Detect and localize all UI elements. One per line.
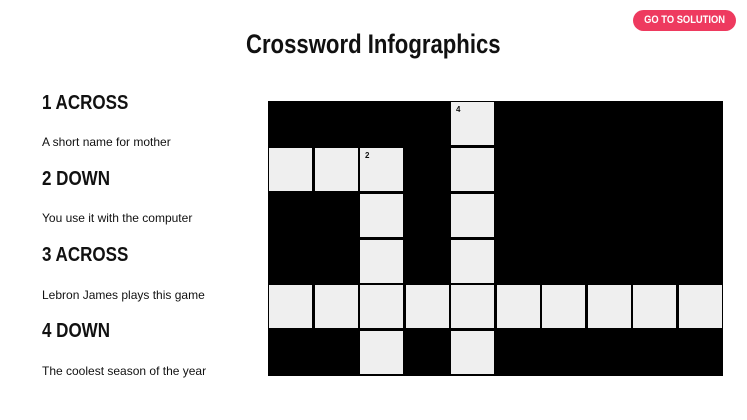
button: go to solution: [633, 10, 736, 31]
clue: 1 across: 1 ACROSS: [42, 92, 128, 114]
clue: 3 across: [42, 244, 205, 302]
clue: 3 across: Lebron James plays this game: [42, 288, 205, 302]
button: go to solution: GO TO SOLUTION: [644, 14, 725, 26]
title: Crossword Infographics: [246, 29, 501, 59]
clue: 1 across: [42, 92, 171, 149]
clue: 1 across: A short name for mother: [42, 135, 171, 149]
clue: 2 down: 2 DOWN: [42, 168, 110, 190]
clue: 2 down: [42, 168, 192, 225]
crossword grid: 2: [365, 151, 369, 160]
clue: 4 down: [42, 320, 206, 378]
clue: 4 down: The coolest season of the year: [42, 364, 206, 378]
crossword grid: 4: [456, 105, 460, 114]
crossword grid: [268, 101, 723, 376]
clue: 2 down: You use it with the computer: [42, 211, 192, 225]
clue: 4 down: 4 DOWN: [42, 320, 110, 342]
clue: 3 across: 3 ACROSS: [42, 244, 128, 266]
